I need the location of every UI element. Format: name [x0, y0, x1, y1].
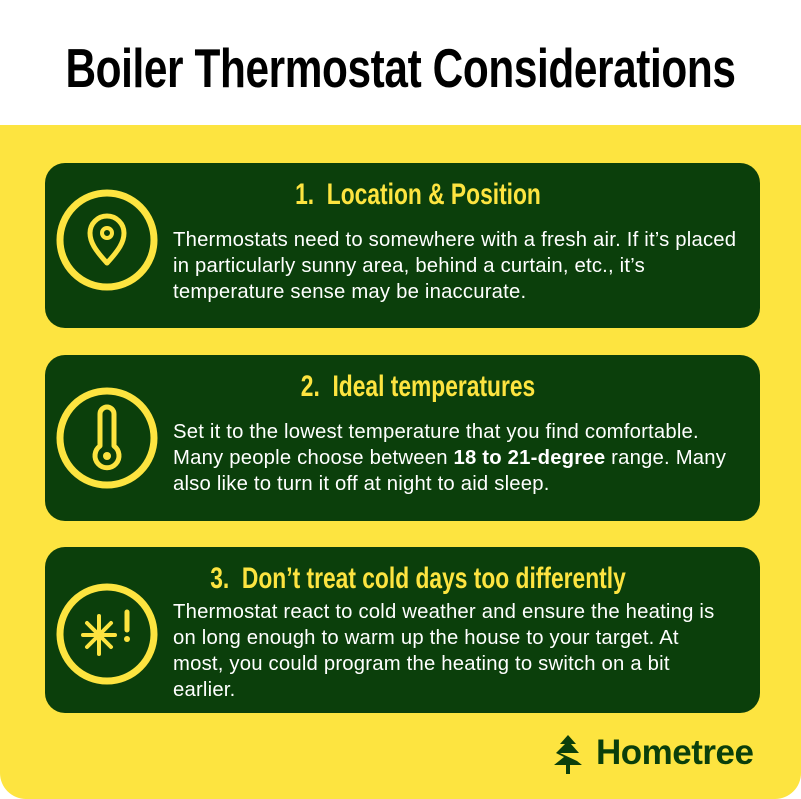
heading: 3. Don’t treat cold days too differently [210, 562, 626, 595]
heading: 2. Ideal temperatures [301, 370, 535, 403]
panel: cold days [45, 547, 760, 713]
text: most, you could program the heating to switch on a bit [173, 653, 670, 675]
text: Thermostats need to somewhere with a fresh air. If it’s placed [173, 229, 736, 251]
icon: location pin [56, 190, 158, 290]
icon: thermometer [56, 388, 158, 488]
logo: Hometree: Hometree [596, 733, 753, 772]
text: in particularly sunny area, behind a curtain, etc., it’s [173, 255, 645, 277]
heading: 1. Location & Position [295, 178, 541, 211]
text: on long enough to warm up the house to your target. At [173, 627, 679, 649]
text: Thermostat react to cold weather and ensure the heating is [173, 601, 714, 623]
text [173, 421, 726, 495]
text: temperature sense may be inaccurate. [173, 281, 526, 303]
text: Many people choose between 18 to 21-degree range. Many [173, 447, 726, 469]
title: Boiler Thermostat Considerations [65, 37, 736, 99]
text [173, 229, 736, 303]
text: also like to turn it off at night to aid sleep. [173, 473, 550, 495]
icon: snowflake [56, 584, 158, 684]
panel: ideal temperatures [45, 355, 760, 521]
text: Set it to the lowest temperature that you find comfortable. [173, 421, 699, 443]
panel: location [45, 163, 760, 328]
text [173, 601, 714, 701]
text: earlier. [173, 679, 235, 701]
